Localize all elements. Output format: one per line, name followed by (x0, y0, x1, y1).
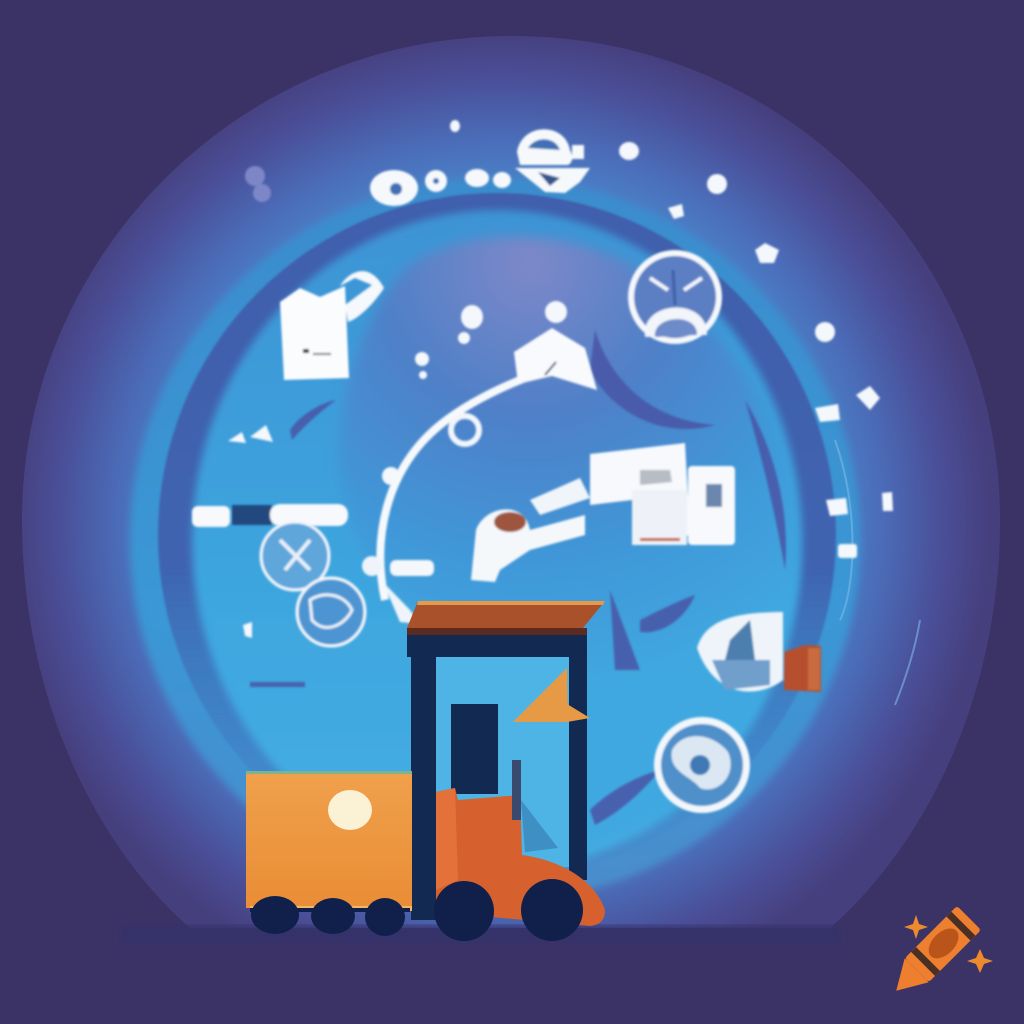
orange triangle (513, 668, 590, 722)
icon: globe bottom right (654, 717, 750, 813)
blue ring discs (130, 178, 860, 902)
icon: robot and documents (471, 443, 735, 582)
faint dots top left (245, 166, 271, 202)
curved thin lines (835, 440, 920, 705)
icon: bar with pills left (192, 504, 348, 527)
orange cargo box (246, 771, 412, 911)
icon: top chain cluster (370, 129, 590, 206)
icon: crayon logo (884, 906, 993, 1003)
forklift mast (411, 650, 587, 920)
forklift wheels (250, 879, 583, 941)
forklift roof (407, 601, 605, 657)
forklift (246, 601, 605, 941)
forklift body (436, 760, 605, 926)
icon: machine circle right (697, 612, 821, 692)
dark swooshes (250, 330, 786, 825)
ground shadow (120, 926, 840, 944)
forklift window (436, 657, 569, 867)
icon: shirt document (280, 271, 384, 380)
icon: sad face circle (631, 253, 719, 341)
icon: left globes (261, 522, 365, 646)
icon: crane arm (362, 328, 597, 624)
icon group: scattered dots (228, 120, 893, 638)
